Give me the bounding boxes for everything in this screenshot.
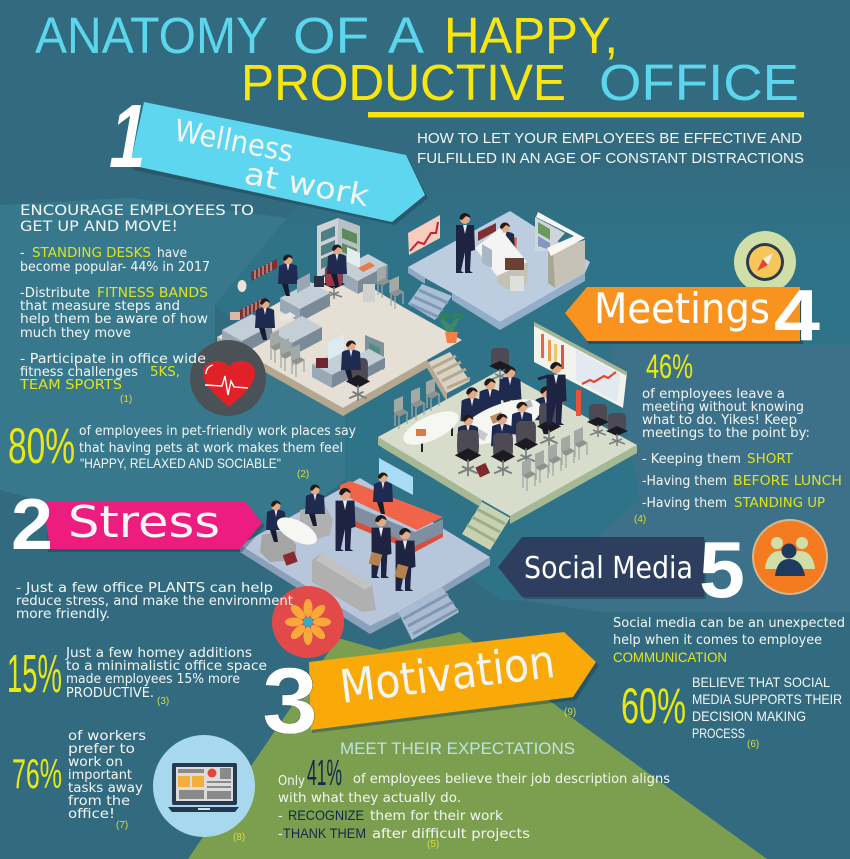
stat: 15 percent: 15% [7,644,62,704]
banner 1: wellness at work [103,87,428,225]
background panel: left light area [0,198,345,552]
title: ANATOMY [35,7,268,64]
lounge seating [260,484,333,566]
text: meetings: -Having them [642,496,727,511]
title underline [368,112,804,118]
text: meetings [634,348,842,525]
text: meetings: SHORT [747,452,793,467]
stat: 60 percent: DECISION MAKING [692,708,806,724]
empty chairs [377,265,404,309]
banner 4: meetings: Meetings [594,284,770,333]
banner 1: wellness at work: 1 [103,87,156,187]
text: wellness: 5KS, [150,365,180,380]
stairs [427,352,470,402]
text: wellness: become popular- 44% in 2017 [20,260,210,275]
text: meetings: STANDING UP [734,496,825,511]
stat: 76 percent: important [68,768,132,783]
reception counter [340,472,443,552]
text: wellness: - [20,246,25,261]
text: wellness [19,203,254,405]
icon: laptop [153,735,255,837]
standing men [336,488,416,591]
icon: heart [190,340,266,416]
stat: 60 percent: (6) [747,739,759,750]
banner 1: wellness at work: at work [242,156,373,214]
text: wellness: much they move [20,326,131,341]
text: motivation: 41% [307,752,342,793]
text: wellness: ENCOURAGE EMPLOYEES TO [20,203,254,219]
text: motivation: - [278,809,283,824]
banner 3: motivation: 3 [262,648,318,753]
text: wellness: STANDING DESKS [32,246,151,261]
wall screen [379,458,413,495]
text: social media: COMMUNICATION [613,649,727,665]
title: A [388,7,424,64]
text: motivation: Only [278,774,305,789]
text: wellness: have [157,246,187,261]
stat: 76 percent: work on [68,755,123,770]
banner 4: meetings [565,276,820,356]
stat: 76 percent: tasks away [68,781,143,796]
office scene: wellness floor [217,218,470,416]
stat: 76 percent: from the [68,794,130,809]
workstation: bottom desk [312,334,385,401]
text: meetings: of employees leave a [642,387,785,402]
banner 2: stress: 2 [11,485,53,565]
text: motivation: of employees believe their job description aligns [353,772,670,787]
text: wellness: help them be aware of how [20,312,208,327]
text: motivation: - [278,827,283,842]
icon: people [752,519,828,595]
bookshelf [317,218,360,278]
stat: 76 percent: office! [68,807,115,822]
workstation: upper left desk [278,254,330,322]
text: social media: help when it comes to employee [613,633,822,648]
office scene: meeting floor [378,322,637,550]
stat: 80 percent [8,418,356,480]
wall chart [408,215,440,255]
background panel: right blue area [520,345,850,612]
text: stress: - Just a few office PLANTS can help [16,581,273,596]
text: meetings: meetings to the point by: [642,426,810,441]
text: wellness: that measure steps and [20,299,180,314]
desk with two people [456,213,528,291]
stat: 80 percent: 80% [8,418,75,474]
banner 3: motivation: Motivation [337,634,558,714]
banner 4: meetings: 4 [774,276,820,356]
stat: 15 percent: Just a few homey additions [65,646,252,661]
banner 2: stress [11,485,265,565]
stat: 80 percent: of employees in pet-friendly work places say [79,424,356,439]
stat: 60 percent: PROCESS [692,725,745,741]
text: wellness: FITNESS BANDS [97,286,208,301]
banner 1: wellness at work: Wellness [172,113,296,170]
subtitle: HOW TO LET YOUR EMPLOYEES BE EFFECTIVE AND [417,130,802,147]
title: HAPPY, [444,7,618,64]
partition with shelf [535,212,585,288]
text: meetings: BEFORE LUNCH [733,474,842,489]
sofa [312,553,376,612]
workstation: back desk [323,244,388,302]
stat: 80 percent: "HAPPY, RELAXED AND SOCIABLE" [80,455,281,471]
text: motivation: them for their work [370,809,503,824]
stat: 15 percent [7,644,267,707]
stat: 15 percent: made employees 15% more [66,672,240,687]
stat: 15 percent: PRODUCTIVE. [66,686,154,701]
text: social media: Social media can be an unexpected [613,616,845,631]
icon: compass [734,231,796,293]
text: motivation: with what they actually do. [278,791,461,806]
workstation: left desks [222,298,322,356]
text: motivation: RECOGNIZE [288,807,364,823]
banner 5: social media: 5 [699,525,745,614]
banner 3: motivation [262,632,599,753]
text: meetings: -Having them [642,474,727,489]
background panel: centre teal area [215,165,850,600]
stat: 60 percent [621,674,842,750]
banner 5: social media: Social Media [524,551,693,586]
background: green triangle [188,632,767,859]
text: wellness: TEAM SPORTS [19,378,122,393]
title: OFFICE [599,54,799,111]
text: motivation: after difficult projects [372,827,530,842]
text: wellness: GET UP AND MOVE! [20,219,178,235]
banner 2: stress: Stress [68,497,220,548]
stat: 80 percent: (2) [297,469,309,480]
grey chairs [270,330,305,377]
title [35,7,799,111]
side table [394,378,463,452]
text: stress: more friendly. [16,607,110,622]
text: motivation: MEET THEIR EXPECTATIONS [340,739,575,758]
wall books and clock [238,259,277,319]
office scene: top right floor [408,211,590,330]
stat: 60 percent: BELIEVE THAT SOCIAL [692,674,830,690]
meeting table group [453,348,628,478]
text: social media [613,616,845,665]
text: wellness: - Participate in office wide [20,352,206,367]
stat: 60 percent: 60% [621,678,686,734]
stat: 15 percent: to a minimalistic office space [66,659,267,674]
text: meetings: 46% [646,348,693,386]
text: motivation: (5) [427,839,439,850]
stat: 15 percent: (3) [157,696,169,707]
subtitle [417,130,804,167]
text: meetings: (4) [634,514,646,525]
title: OF [293,7,369,64]
text: meetings: meeting without knowing [642,400,804,415]
office scene: reception floor [240,458,490,640]
grey chair row [522,427,588,491]
text: meetings: - Keeping them [642,452,741,467]
stat: 76 percent: prefer to [68,742,135,757]
source (8): (8) [233,832,245,843]
title: PRODUCTIVE [241,54,566,111]
text: wellness: fitness challenges [20,365,138,380]
text: motivation: THANK THEM [283,825,366,841]
stairs [408,284,452,320]
stat: 80 percent: that having pets at work makes them feel [79,441,343,456]
stat: 76 percent: (7) [116,820,128,831]
stat: 76 percent: of workers [68,729,146,744]
stat: 76 percent: 76% [12,750,62,797]
banner 5: social media [498,525,745,614]
stairs [398,587,459,640]
infographic canvas: (9) [564,707,576,718]
text: meetings: what to do. Yikes! Keep [642,413,797,428]
subtitle: FULFILLED IN AN AGE OF CONSTANT DISTRACTIONS [417,150,804,167]
text: wellness: (1) [120,394,132,405]
stairs [462,502,510,550]
text: motivation [278,739,670,850]
text: stress: reduce stress, and make the environment [16,594,293,609]
plant [437,312,464,343]
text: wellness: -Distribute [20,286,90,301]
stat: 76 percent [12,729,146,831]
text: stress [16,581,293,622]
icon: flower [272,586,344,658]
presentation board [534,322,627,416]
